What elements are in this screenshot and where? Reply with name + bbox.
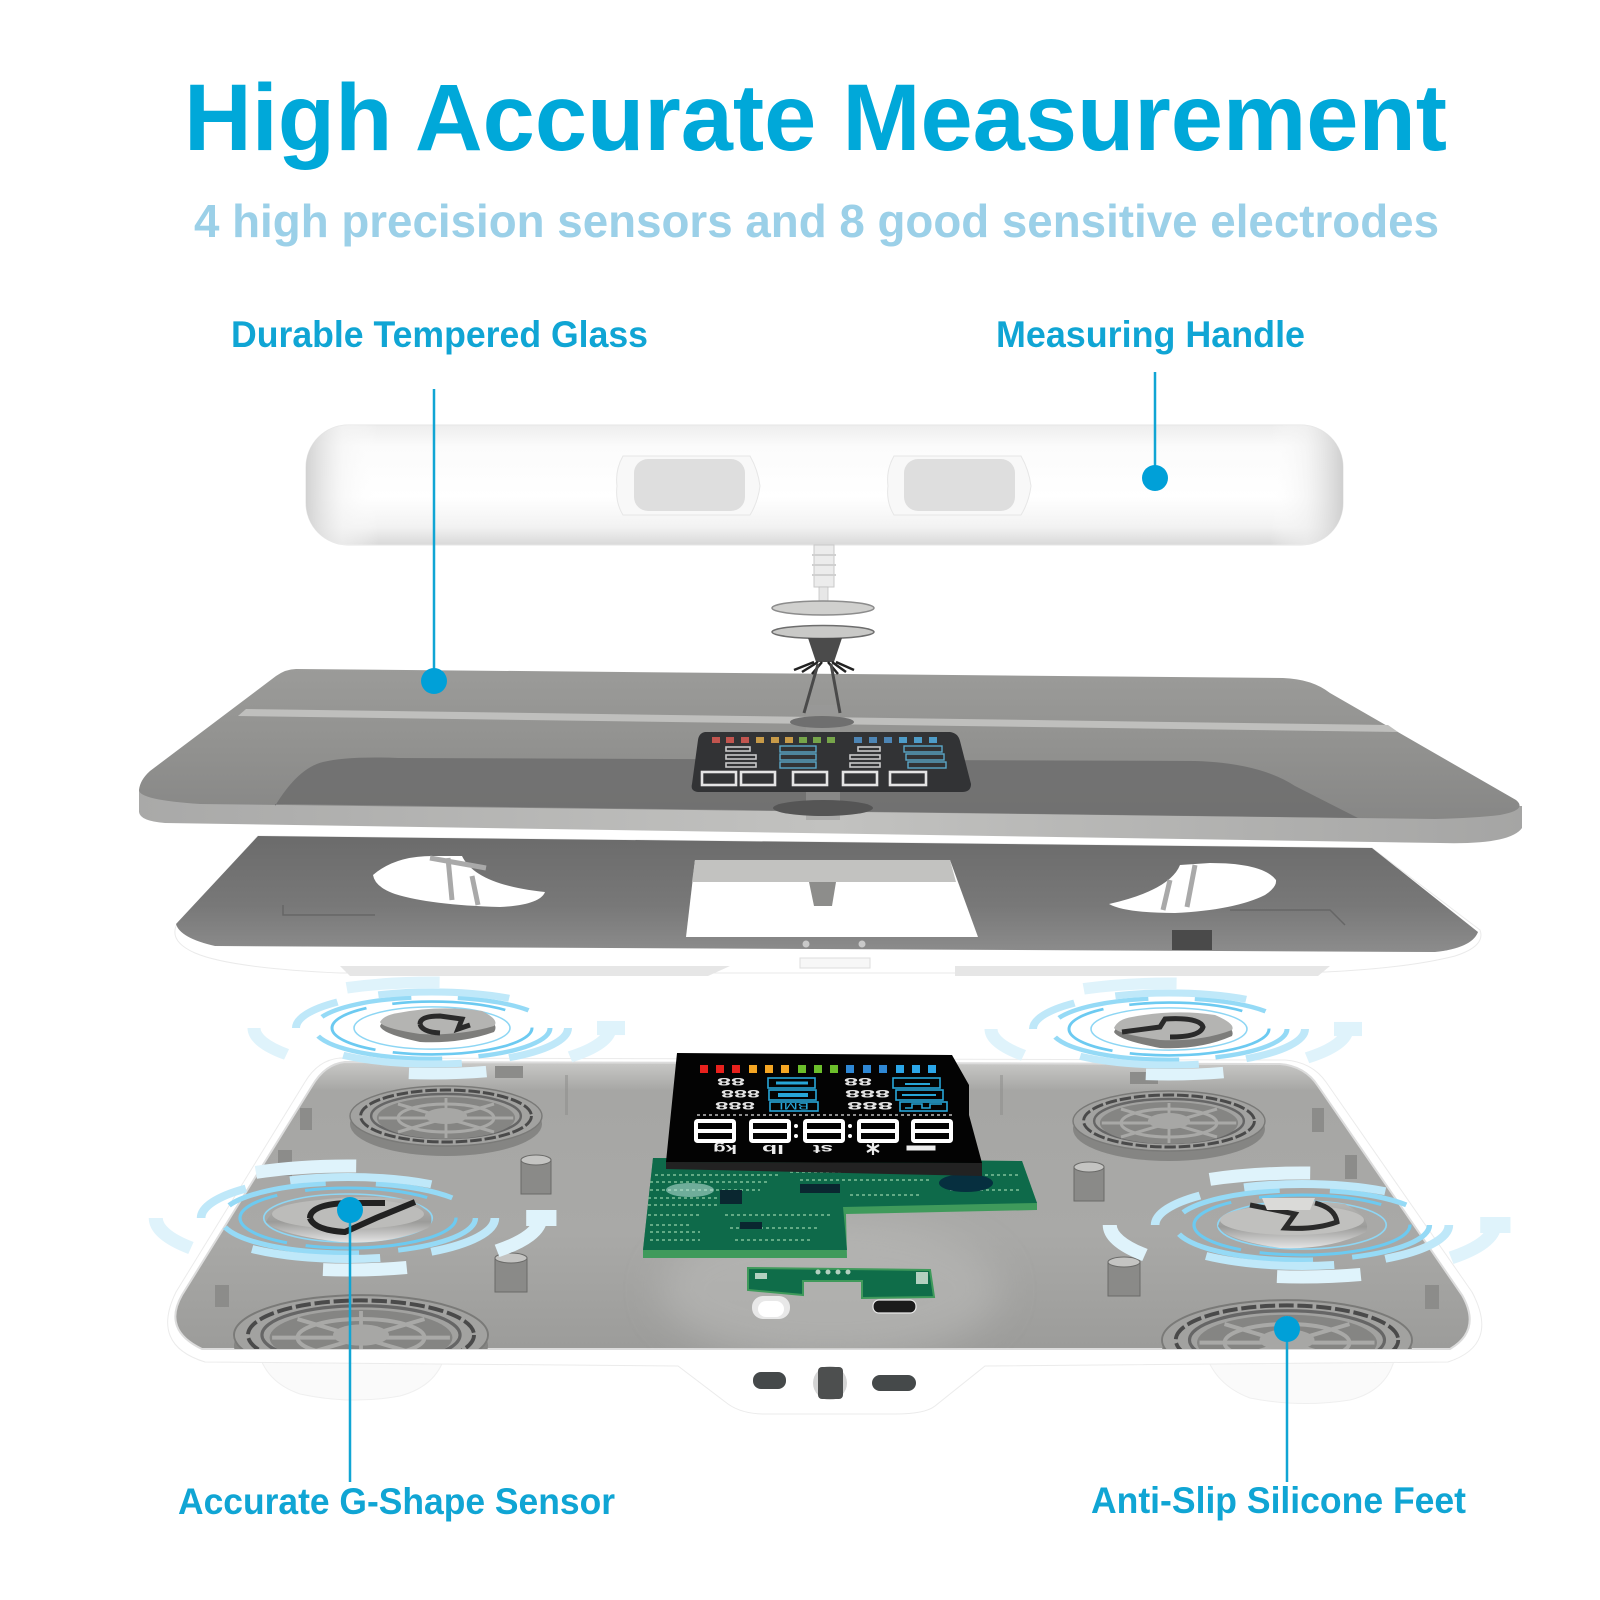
label: sensor: Accurate G-Shape Sensor bbox=[178, 1481, 615, 1522]
main circuit board bbox=[643, 1158, 1037, 1258]
silicone foot: right bbox=[1205, 1352, 1396, 1404]
label: feet: Anti-Slip Silicone Feet bbox=[1091, 1480, 1466, 1521]
usb circuit board bbox=[748, 1268, 934, 1298]
leader line: glass bbox=[421, 389, 447, 694]
dark reflection bbox=[275, 758, 1358, 818]
main digits bbox=[696, 1121, 951, 1141]
small readouts: 888 bbox=[847, 1099, 893, 1111]
small readouts: 888 bbox=[845, 1087, 890, 1099]
silicone foot: left bbox=[258, 1350, 446, 1400]
sensor ring: mid left bbox=[156, 1166, 556, 1270]
load cell fan: top right bbox=[1073, 1091, 1265, 1161]
small readouts bbox=[715, 1075, 893, 1111]
units bbox=[713, 1142, 935, 1156]
usb-c port bbox=[873, 1300, 916, 1313]
small readouts: 88 bbox=[717, 1075, 745, 1087]
sensor: top left bbox=[380, 1008, 496, 1042]
center port bbox=[813, 1366, 847, 1400]
sensor ring: top left bbox=[254, 982, 625, 1074]
sensor: mid right bbox=[1218, 1198, 1367, 1248]
units: st bbox=[813, 1142, 833, 1156]
subtitle: 4 high precision sensors and 8 good sensitive electrodes bbox=[194, 195, 1439, 247]
leader line: sensor bbox=[337, 1197, 363, 1482]
hole: left bbox=[373, 856, 545, 907]
title: High Accurate Measurement bbox=[184, 65, 1447, 171]
silicone foot housing: bottom right bbox=[1161, 1299, 1413, 1349]
units: lb bbox=[762, 1142, 784, 1156]
tab holes bbox=[753, 1372, 916, 1391]
electrode window: right bbox=[888, 456, 1031, 515]
indicator hole bbox=[752, 1296, 790, 1319]
glass plate bbox=[139, 669, 1522, 843]
small readouts: 88 bbox=[844, 1075, 872, 1087]
label: measuring handle: Measuring Handle bbox=[996, 314, 1305, 355]
sensor: mid left bbox=[266, 1197, 431, 1242]
measuring handle bbox=[306, 425, 1343, 545]
center window bbox=[686, 860, 978, 937]
connector stem and washers bbox=[772, 545, 874, 713]
sensor: top right bbox=[1114, 1012, 1233, 1048]
leader line: handle bbox=[1142, 372, 1168, 491]
label: durable tempered glass: Durable Tempered Glass bbox=[231, 314, 648, 355]
electrode window: left bbox=[617, 456, 760, 515]
leader line: feet bbox=[1274, 1316, 1300, 1482]
bottom tray bbox=[168, 1058, 1482, 1414]
silicone foot housing: bottom left bbox=[233, 1294, 489, 1349]
small readouts: 888 bbox=[715, 1099, 755, 1111]
small readouts: 888 bbox=[721, 1087, 760, 1099]
hole: right bbox=[1109, 863, 1276, 913]
dotted divider bbox=[697, 1114, 953, 1116]
sensor ring: mid right bbox=[1110, 1173, 1510, 1277]
clips along tray edges bbox=[215, 1066, 1439, 1309]
indicator bars bbox=[700, 1065, 936, 1073]
ghost LCD bbox=[692, 732, 971, 792]
support posts bbox=[495, 1155, 1140, 1296]
sensor ring: top right bbox=[991, 983, 1362, 1075]
load cell fan: top left bbox=[350, 1086, 542, 1156]
units: kg bbox=[713, 1142, 737, 1156]
LCD display bbox=[666, 1053, 982, 1176]
glass strip bbox=[238, 709, 1398, 732]
icon boxes bbox=[768, 1078, 947, 1111]
LCD display: BMI bbox=[779, 1101, 809, 1111]
mid plate bbox=[175, 836, 1481, 976]
